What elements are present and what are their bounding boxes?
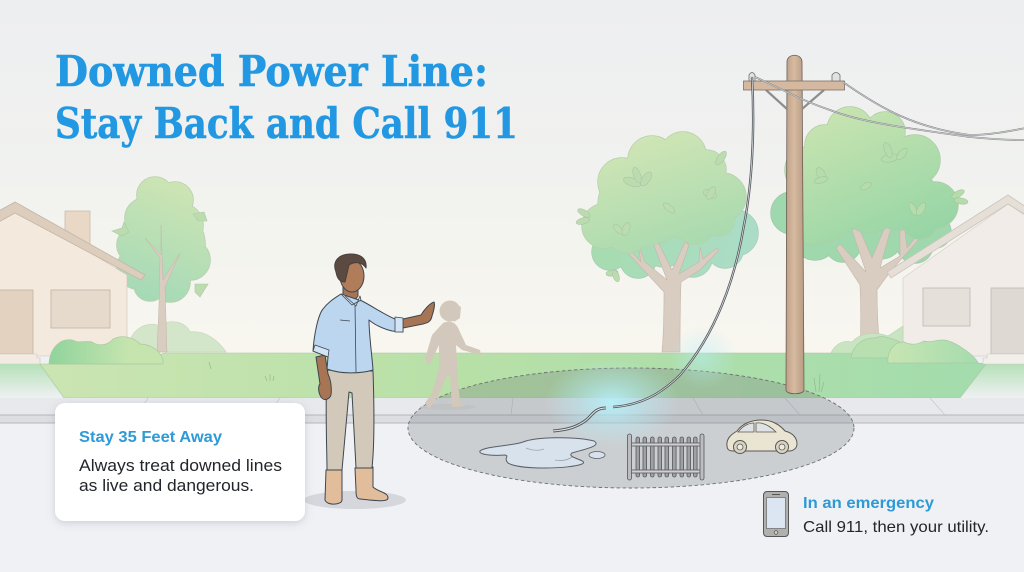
road [0,424,1024,572]
grass tufts [209,362,824,392]
bystander silhouette [420,300,481,410]
emergency note [803,495,989,536]
wire glow [669,326,737,390]
crossarm [744,81,844,90]
intact wires [755,77,1024,140]
boots [325,467,388,504]
path to right house [960,364,1024,398]
curb [0,415,1024,423]
tree: middle [575,132,758,352]
fence [628,434,704,480]
sidewalk [0,398,1024,415]
title: Stay Back and Call 911 [55,99,518,148]
lawn [40,353,986,398]
leaves on right tree [813,141,968,217]
raised forearm and hand [403,302,434,328]
tree: far left [112,177,210,352]
sky background [0,0,1024,354]
card heading: Stay 35 Feet Away [79,429,222,446]
shirt [313,294,403,373]
info card [55,403,305,521]
house door [991,288,1024,354]
downed wire [553,77,753,431]
emergency note: Call 911, then your utility. [803,519,989,536]
bushes: right [831,326,978,363]
utility pole [744,55,844,394]
hanging arm [316,355,331,400]
title: Downed Power Line: [55,47,488,96]
neck and head [335,254,366,301]
background bushes left [128,322,226,352]
icon: phone [764,492,788,536]
trousers [326,370,374,470]
danger zone ellipse [408,368,854,488]
path to left house [0,364,64,398]
house door [0,290,33,354]
card body: as live and dangerous. [79,477,254,495]
insulators [749,72,840,81]
emergency note: In an emergency [803,495,934,512]
electric glow [544,359,680,447]
house: right [887,195,1024,364]
card body: Always treat downed lines [79,457,282,475]
house: left [0,202,145,364]
house window [51,290,110,328]
leaves on middle tree [575,149,728,283]
puddle [480,438,605,468]
woman [304,254,434,509]
house window [923,288,970,326]
bush: left [49,337,163,364]
title [55,47,518,148]
shadow [304,491,406,509]
card body [79,457,282,495]
tree: right [771,107,968,352]
car [727,420,797,454]
